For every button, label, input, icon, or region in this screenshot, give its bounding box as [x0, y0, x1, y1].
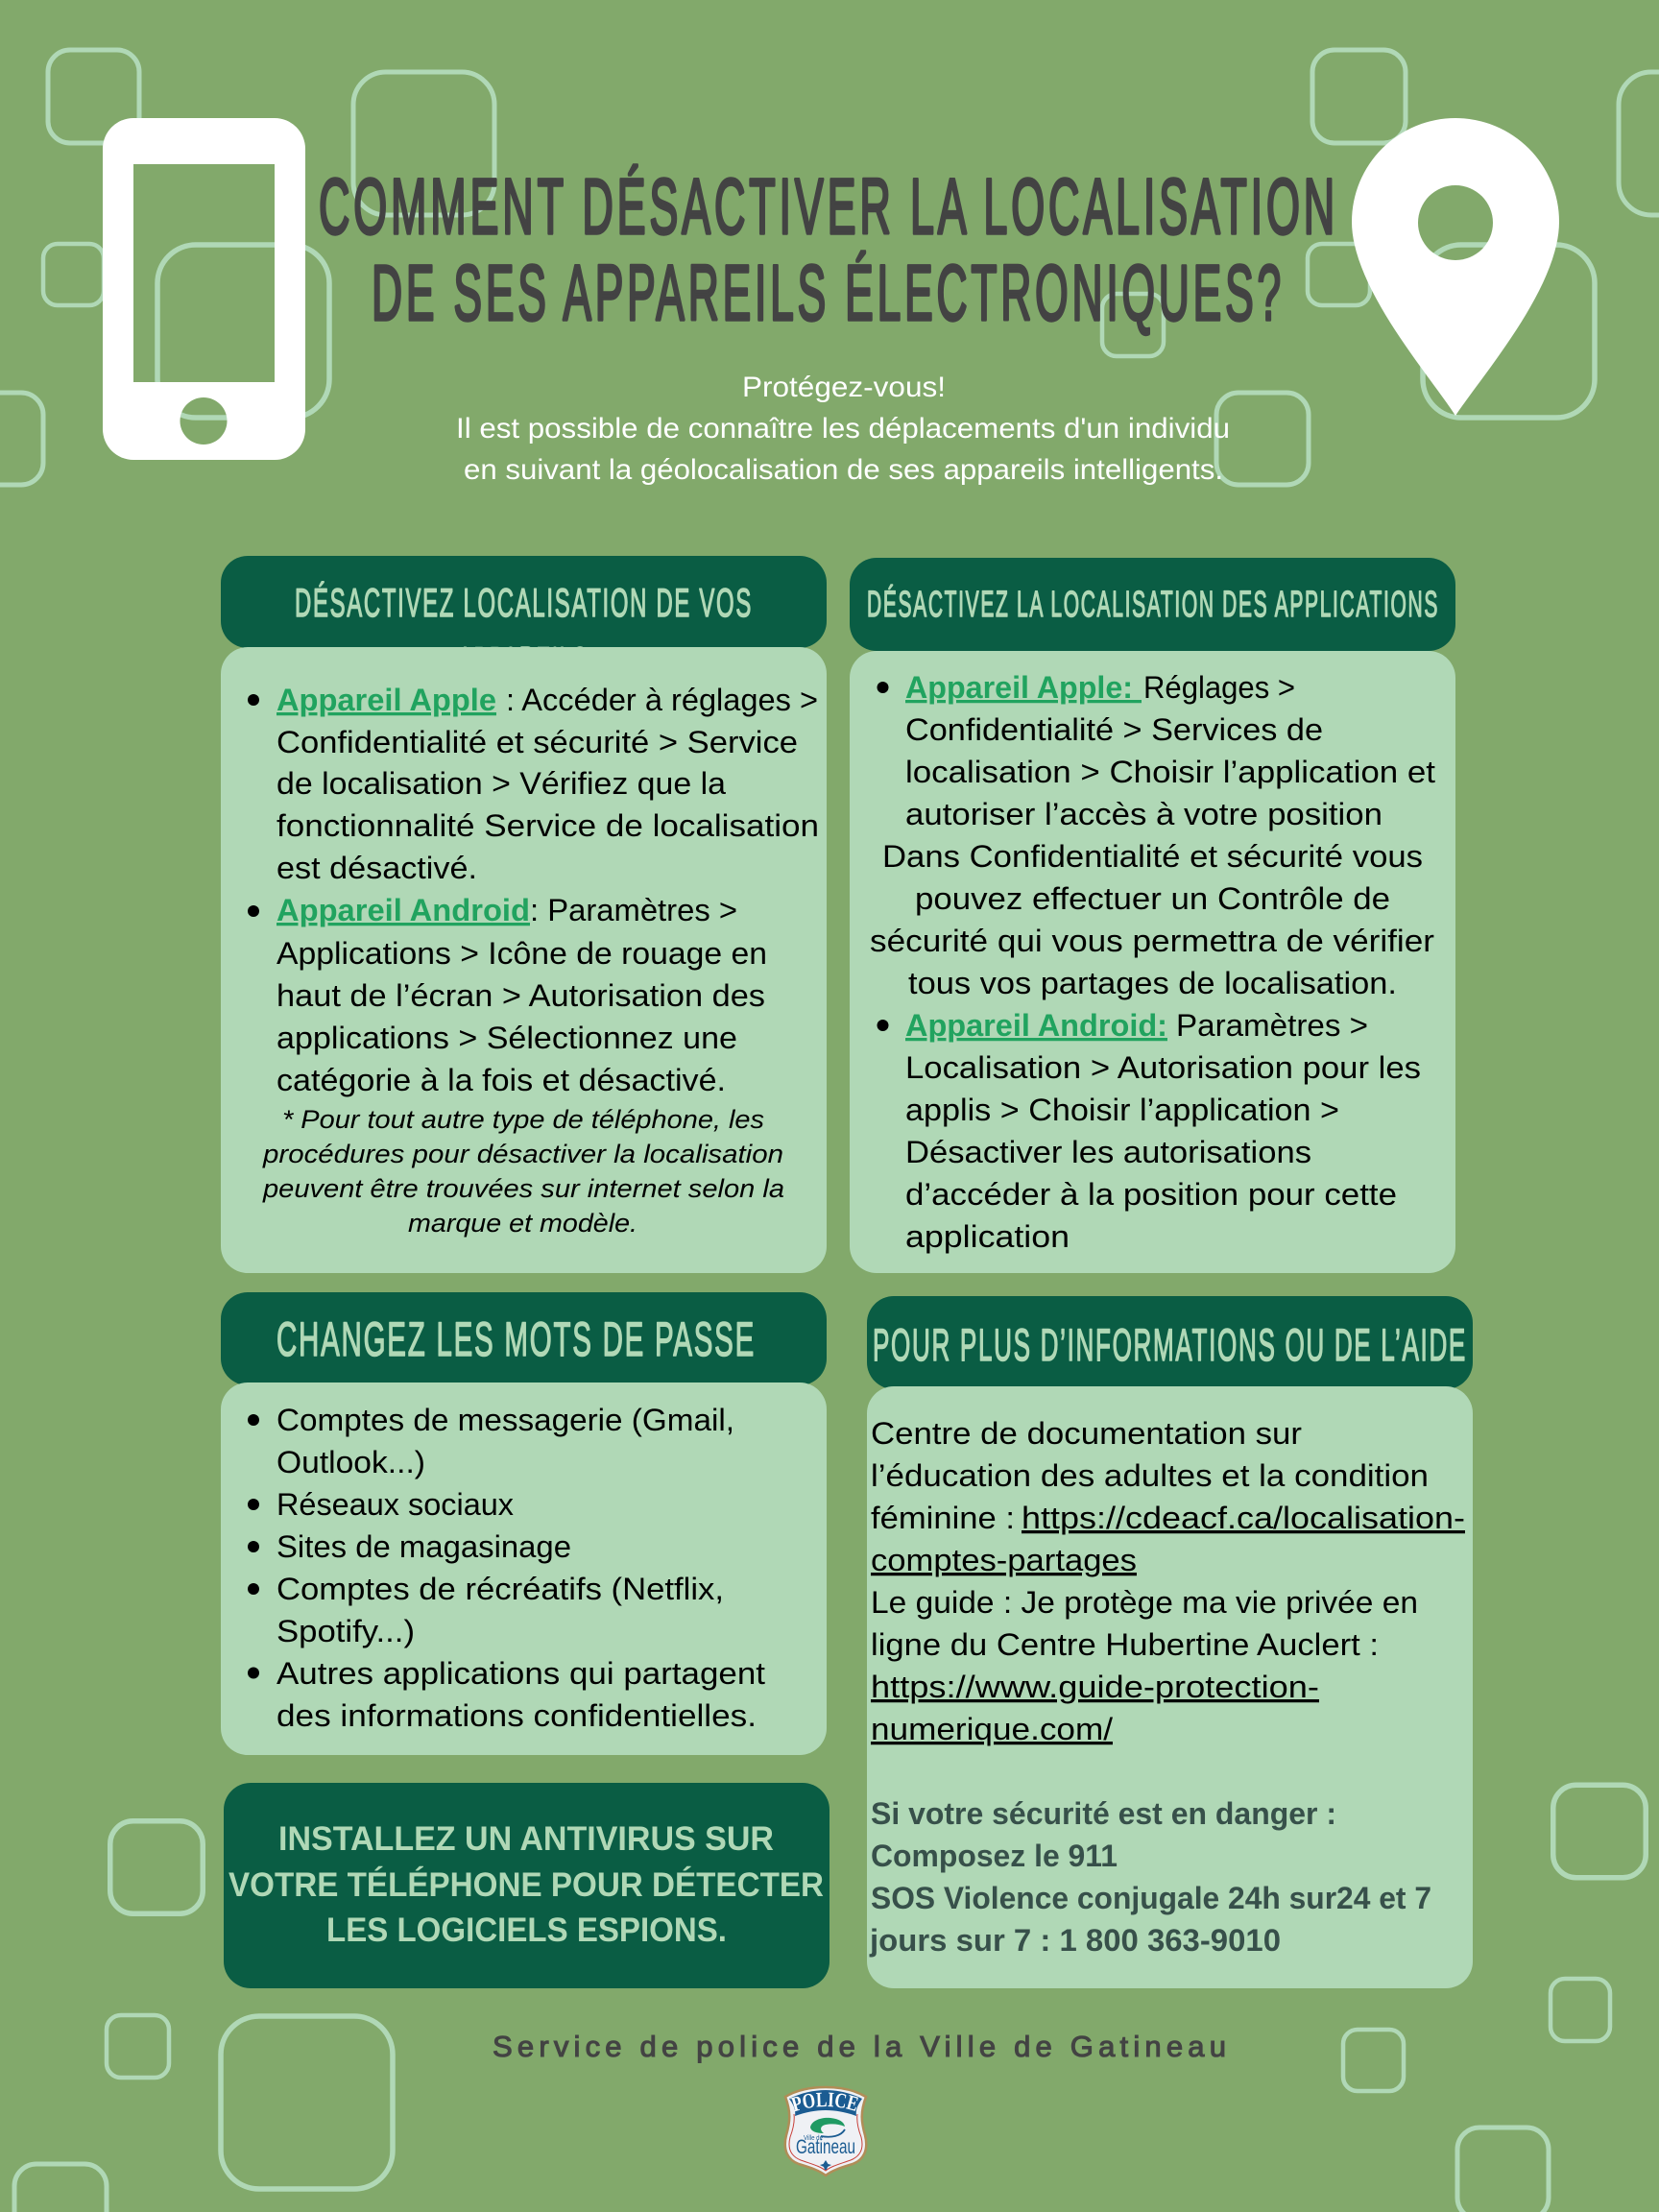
intro text [456, 372, 1230, 486]
bullet list: device steps: : Accéder à réglages > [506, 683, 818, 717]
bullet list: accounts: Comptes de messagerie (Gmail, [276, 1403, 734, 1437]
emergency contacts: jours sur 7 : 1 800 363-9010 [869, 1923, 1281, 1958]
bullet list: accounts: Spotify...) [276, 1614, 415, 1648]
bullet list: accounts: Comptes de récréatifs (Netflix, [276, 1572, 724, 1606]
bullet list: device steps: Confidentialité et sécurité > Service [276, 725, 798, 759]
resources text: Le guide : Je protège ma vie privée en [871, 1585, 1418, 1620]
header: application location [850, 558, 1455, 651]
emergency contacts [869, 1796, 1431, 1958]
bullet list: accounts: Autres applications qui partagent [276, 1656, 765, 1691]
header: device location [221, 556, 827, 684]
bullet list: application steps: Réglages > [1143, 670, 1295, 705]
bullet list: device steps: : Paramètres > [530, 893, 737, 927]
bullet list: device steps [248, 683, 819, 1097]
intro text: Protégez-vous! [742, 372, 946, 403]
header: device location: DÉSACTIVEZ LOCALISATION DE VOS [295, 580, 753, 625]
bullet list: application steps [870, 670, 1435, 1254]
logo: police badge: Gatineau [796, 2136, 855, 2158]
header: device location: APPAREILS [458, 638, 589, 684]
bullet list: application steps: sécurité qui vous permettra de vérifier [870, 924, 1434, 958]
bullet list: device steps: haut de l’écran > Autorisation des [276, 978, 765, 1013]
footnote: marque et modèle. [408, 1209, 637, 1238]
bullet list: device steps: Appareil Apple [276, 683, 496, 717]
bullet list: device steps: est désactivé. [276, 851, 477, 885]
panel: change passwords [221, 1292, 827, 1755]
bullet list: device steps: applications > Sélectionnez une [276, 1021, 737, 1055]
resources text [871, 1416, 1465, 1746]
bullet list: application steps: Localisation > Autorisation pour les [905, 1050, 1421, 1085]
bullet list: device steps: Applications > Icône de rouage en [276, 936, 767, 971]
resources text: ligne du Centre Hubertine Auclert : [871, 1627, 1379, 1662]
bullet list: accounts: Outlook...) [276, 1445, 425, 1479]
title [319, 163, 1338, 337]
resources text: numerique.com/ [871, 1712, 1114, 1746]
intro text: en suivant la géolocalisation de ses appareils intelligents. [464, 454, 1223, 486]
bullet list: application steps: Appareil Apple: [905, 670, 1142, 705]
bullet list: application steps: Appareil Android: [905, 1008, 1167, 1043]
card background [867, 1386, 1473, 1988]
resources text: https://cdeacf.ca/localisation- [1022, 1501, 1465, 1535]
footnote: peuvent être trouvées sur internet selon la [262, 1174, 784, 1203]
logo: police badge: Ville de [804, 2133, 823, 2142]
bullet list: accounts: Réseaux sociaux [276, 1487, 514, 1522]
bullet list: device steps: catégorie à la fois et désactivé. [276, 1063, 726, 1097]
bullet list: device steps: Appareil Android [276, 893, 530, 927]
bullet list: accounts: des informations confidentielles. [276, 1698, 757, 1733]
icon: smartphone [103, 118, 305, 460]
header: change passwords: CHANGEZ LES MOTS DE PASSE [276, 1312, 756, 1366]
footnote: procédures pour désactiver la localisation [262, 1140, 783, 1168]
bullet list: accounts: Sites de magasinage [276, 1529, 571, 1564]
bullet list: application steps: localisation > Choisir l’application et [905, 755, 1435, 789]
bullet list: application steps: Désactiver les autorisations [905, 1135, 1311, 1169]
resources text: Centre de documentation sur [871, 1416, 1302, 1451]
icon: location pin [1352, 118, 1559, 416]
bullet list: application steps: d’accéder à la position pour cette [905, 1177, 1397, 1212]
bullet list: application steps: pouvez effectuer un Contrôle de [915, 881, 1390, 916]
bullet list: accounts [248, 1403, 765, 1733]
footnote [262, 1105, 784, 1238]
bullet list: application steps: Dans Confidentialité et sécurité vous [882, 839, 1423, 874]
panel: more information [867, 1296, 1473, 1988]
footnote: * Pour tout autre type de téléphone, les [282, 1105, 764, 1134]
callout: install antivirus: LES LOGICIELS ESPIONS. [326, 1911, 727, 1949]
emergency contacts: Composez le 911 [871, 1839, 1118, 1873]
header: change passwords [221, 1292, 827, 1385]
panel: application location [850, 558, 1455, 1273]
emergency contacts: Si votre sécurité est en danger : [871, 1796, 1336, 1831]
card background [221, 647, 827, 1273]
bullet list: application steps: applis > Choisir l’application > [905, 1093, 1339, 1127]
emergency contacts: SOS Violence conjugale 24h sur24 et 7 [871, 1881, 1431, 1915]
header: more information [867, 1296, 1473, 1389]
bullet list: application steps: Confidentialité > Services de [905, 712, 1323, 747]
callout: install antivirus [224, 1783, 830, 1988]
callout: install antivirus: VOTRE TÉLÉPHONE POUR DÉTECTER [228, 1865, 824, 1904]
bullet list: application steps: autoriser l’accès à votre position [905, 797, 1382, 831]
resources text: l’éducation des adultes et la condition [871, 1458, 1429, 1493]
bullet list: application steps: application [905, 1219, 1070, 1254]
callout: install antivirus: INSTALLEZ UN ANTIVIRUS SUR [278, 1820, 774, 1858]
footer text: Service de police de la Ville de Gatineau [493, 2030, 1226, 2063]
card background [221, 1382, 827, 1755]
bullet list: device steps: fonctionnalité Service de localisation [276, 808, 819, 843]
resources text: comptes-partages [871, 1543, 1137, 1577]
logo: police badge [783, 2085, 868, 2177]
panel: device location [221, 556, 827, 1273]
bullet list: device steps: de localisation > Vérifiez que la [276, 766, 727, 801]
intro text: Il est possible de connaître les déplacements d'un individu [456, 413, 1230, 445]
card background [850, 651, 1455, 1273]
resources text: féminine : [871, 1501, 1015, 1535]
logo: police badge: POLICE [790, 2093, 858, 2112]
bullet list: application steps: Paramètres > [1176, 1008, 1368, 1043]
bullet list: application steps: tous vos partages de localisation. [908, 966, 1397, 1000]
resources text: https://www.guide-protection- [871, 1670, 1319, 1704]
